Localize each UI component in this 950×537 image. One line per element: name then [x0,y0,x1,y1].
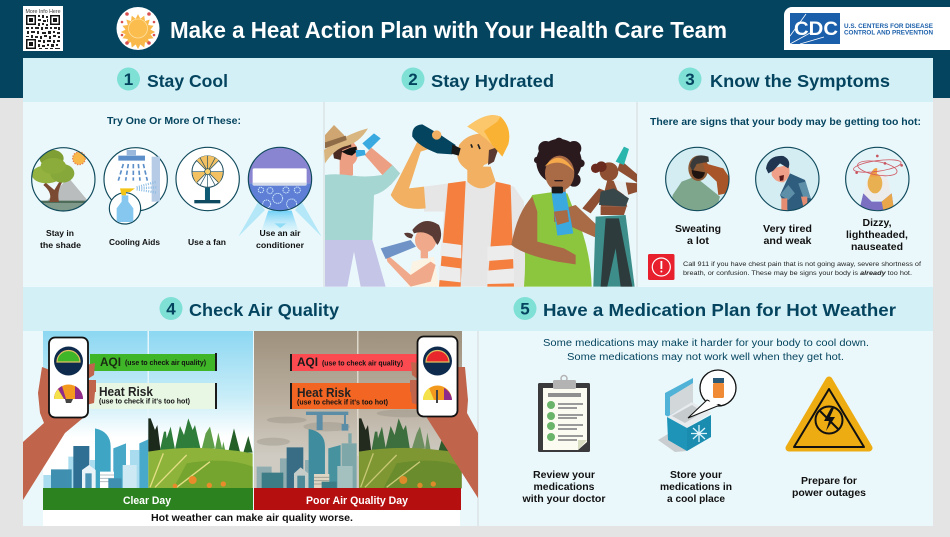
heading 3: Know the Symptoms [678,68,890,91]
heading 2: Stay Hydrated: 2 [408,70,418,89]
caption [43,510,460,526]
clear day bar [43,488,253,510]
label: store your medications: medications in [660,482,732,493]
label: very tired and weak: Very tired [763,224,812,235]
icon: power outage warning [789,380,869,448]
heading 5: Have a Medication Plan: Have a Medication Plan for Hot Weather [543,300,896,320]
label: store your medications: Store your [670,470,722,481]
AQI label, clear day [90,353,217,371]
label: very tired and weak: and weak [764,236,812,247]
poor air quality day bar: Poor Air Quality Day [306,495,409,507]
label: dizzy, lightheaded, nauseated: Dizzy, [862,218,892,229]
label: sweating a lot: Sweating [675,224,721,235]
AQI label, clear day: AQI [100,355,121,369]
emergency note: Call 911 if you have chest pain that is not going away, severe shortness of [683,261,921,268]
icon: shade tree [30,148,97,215]
QR code [23,6,63,51]
panel 4: check air quality [23,331,478,526]
AQI label, clear day: (use to check air quality) [125,358,206,367]
heading 1: Stay Cool: 1 [124,70,133,89]
icon: cooler with medication [658,370,736,452]
heading 4: Check Air Quality: 4 [166,300,176,318]
polluted city [257,458,310,488]
clear day bar: Clear Day [123,495,172,507]
woman in workout clothes [582,147,638,287]
hazy forest [359,418,371,452]
CDC logo: U.S. CENTERS FOR DISEASE [844,23,934,30]
AQI label, poor air day [290,354,418,371]
meadow [148,448,253,488]
label: cooling aids: Cooling Aids [109,237,160,247]
label: dizzy, lightheaded, nauseated: lightheaded, [846,230,908,241]
heading 1: Stay Cool [117,68,228,91]
heading 3: Know the Symptoms: Know the Symptoms [710,71,890,91]
icon: sweating man [666,147,730,213]
Heat Risk label, clear day [90,383,217,409]
panel 5: medication plan [521,338,869,505]
heading 4: Check Air Quality: Check Air Quality [189,300,339,320]
heading 3: Know the Symptoms: 3 [685,70,695,89]
CDC logo: CDC [794,19,838,40]
label: use an air conditioner: conditioner [256,240,305,250]
left phone with gauges [49,338,88,418]
Heat Risk label, poor air day: Heat Risk [297,386,351,400]
left hand holding phone [23,363,96,500]
label: review your medications: with your doctor [521,494,606,505]
heading 2: Stay Hydrated [402,68,554,91]
Heat Risk label, poor air day: (use to check if it's too hot) [297,400,388,406]
icon: tired man [756,147,819,212]
subheading: There are signs that your body may be getting too hot: [650,117,921,128]
panel 3: know the symptoms [648,117,921,280]
heading 5: Have a Medication Plan: 5 [520,300,530,318]
forest [148,418,161,452]
worker with hard hat [391,115,526,287]
label: stay in the shade: Stay in [46,228,74,238]
Heat Risk label, clear day: Heat Risk [99,385,153,399]
subheading: Try One Or More Of These: [107,116,241,127]
child drinking [381,221,441,287]
poor air quality scene [254,331,462,488]
CDC logo: CONTROL AND PREVENTION [844,30,933,36]
label: prepare for power outages: power outages [792,488,866,499]
caption: Hot weather can make air quality worse. [151,512,353,524]
crane [306,412,348,431]
icon: dizzy woman [846,147,909,211]
man with hat [324,125,400,287]
smog clouds [257,409,437,446]
emergency note: breath, or confusion. These may be signs your body is already too hot. [683,270,910,277]
label: review your medications: medications [534,482,595,493]
icons: three symptoms [666,147,909,213]
Heat Risk label, clear day: (use to check if it's too hot) [99,398,190,406]
label: use an air conditioner: Use an air [260,228,301,238]
QR code: More Info Here [26,9,60,15]
icon: clipboard [538,376,590,452]
poor air quality day bar [254,488,461,510]
CDC logo [784,7,950,50]
heading 2: Stay Hydrated: Stay Hydrated [431,71,554,91]
label: store your medications: a cool place [667,494,725,505]
label: stay in the shade: the shade [40,240,81,250]
icons: four cooling options [30,147,322,240]
Heat Risk label, poor air day [290,383,418,409]
panel 2: people drinking water [324,115,638,287]
icon: sun [116,7,160,50]
label: prepare for power outages: Prepare for [801,476,857,487]
right hand holding phone [410,362,478,498]
clear day scene [43,331,253,488]
label: use a fan: Use a fan [188,237,226,247]
label: sweating a lot: a lot [687,236,710,247]
icon: alert [648,254,674,280]
heading 1: Stay Cool: Stay Cool [147,71,228,91]
icon: cooling aids [104,148,167,224]
woman in green dress [511,138,596,287]
intro text: Some medications may make it harder for your body to cool down. [543,338,869,349]
icon: fan [176,147,239,211]
icon: air conditioner [238,147,322,240]
AQI label, poor air day: (use to check air quality) [322,358,403,368]
AQI label, poor air day: AQI [297,355,318,369]
label: review your medications: Review your [533,470,595,481]
city [43,450,139,488]
panel 1: stay cool [30,116,322,250]
label: dizzy, lightheaded, nauseated: nauseated [851,242,903,253]
header band [0,0,950,98]
intro text: Some medications may not work well when they get hot. [567,352,844,363]
construction frame [342,443,357,488]
title: Make a Heat Action Plan with Your Health Care Team [170,17,727,43]
right phone with gauges [418,336,458,416]
hazy meadow [359,448,462,488]
